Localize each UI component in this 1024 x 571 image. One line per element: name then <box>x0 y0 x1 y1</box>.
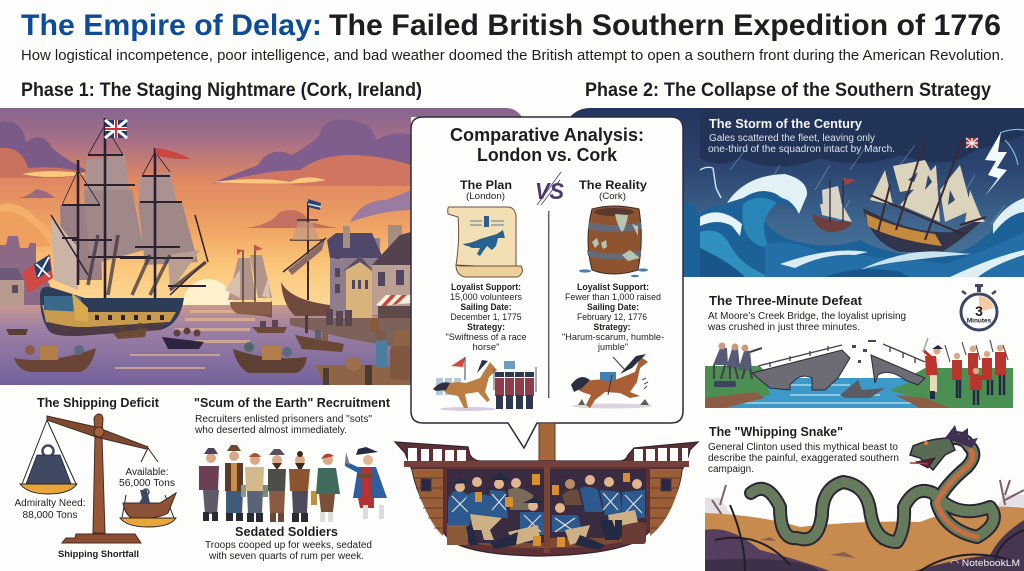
quay with people <box>290 309 411 350</box>
description <box>708 442 899 475</box>
creek <box>725 378 920 408</box>
heavy weight <box>26 446 71 484</box>
label: available: Available: <box>126 467 168 478</box>
description: At Moore's Creek Bridge, the loyalist uprising <box>708 311 906 322</box>
reality details: "Harum-scarum, humble- <box>562 332 664 342</box>
panel: scum of the earth recruitment <box>194 395 391 562</box>
right pan <box>120 518 176 527</box>
text: storm of the century: Gales scattered the fleet, leaving only <box>709 133 875 144</box>
sedated soldiers description: with seven quarts of rum per week. <box>208 551 364 562</box>
column heading: the reality: The Reality <box>579 178 647 192</box>
rowboat with crates right <box>233 349 307 373</box>
column heading: the reality <box>579 178 647 202</box>
small boat and weight <box>123 489 176 518</box>
label: admiralty need: Admiralty Need: <box>14 498 86 509</box>
heading: The Three-Minute Defeat <box>709 294 863 308</box>
sedated soldiers description <box>205 540 372 562</box>
moored ship with flag <box>281 199 330 316</box>
icon: stopwatch: 3 <box>975 303 983 319</box>
heading: "Scum of the Earth" Recruitment <box>194 395 391 410</box>
plan details: horse" <box>472 342 500 352</box>
panel: three-minute defeat <box>705 284 1013 408</box>
left pan <box>20 484 77 494</box>
description: who deserted almost immediately. <box>194 425 347 436</box>
callout heading: Comparative Analysis: <box>450 124 644 145</box>
mast <box>539 423 555 464</box>
plan details: Loyalist Support: <box>451 282 521 292</box>
label: available: 56,000 Tons <box>119 478 175 489</box>
callout heading <box>450 124 644 165</box>
plan details: "Swiftness of a race <box>446 332 526 342</box>
foreground dock and barrels <box>315 330 411 385</box>
panel: Cork harbour at sunset <box>0 108 522 385</box>
gun ports <box>95 315 164 320</box>
clouds <box>0 120 411 250</box>
soldiers left side <box>448 473 544 549</box>
illustration: harum-scarum horse <box>571 354 652 408</box>
illustration: broken bridge battle <box>705 338 1013 408</box>
sedated soldiers heading: Sedated Soldiers <box>235 524 338 539</box>
panel: whipping snake <box>705 425 1024 571</box>
serpent head <box>910 425 978 470</box>
subtitle: How logistical incompetence, poor intelligence, and bad weather doomed the British attempt to open a southern front during the American Revolution. <box>21 48 1004 64</box>
ship hull cross-section <box>395 442 698 556</box>
big wave body <box>684 174 1024 277</box>
title: The Empire of Delay: <box>21 9 322 42</box>
wave crest <box>727 174 807 214</box>
caption: Shipping Shortfall <box>58 549 139 560</box>
redcoats advancing <box>923 338 1008 405</box>
serpent body <box>751 438 994 542</box>
heading: The Shipping Deficit <box>37 395 160 410</box>
panel: shipping deficit <box>14 395 176 560</box>
title continuation: The Failed British Southern Expedition of 1776 <box>329 9 1001 42</box>
column heading: the plan: The Plan <box>460 178 512 192</box>
sun <box>183 279 233 305</box>
text: storm of the century <box>708 117 895 155</box>
ground <box>705 366 1013 408</box>
recruits line-up <box>199 445 387 522</box>
illustration: serpent in thorny landscape <box>705 425 1024 571</box>
description: describe the painful, exaggerated southern <box>708 453 899 464</box>
heading: phase 2: Phase 2: The Collapse of the Southern Strategy <box>585 80 991 101</box>
red ensign <box>22 254 53 293</box>
broken right span <box>871 355 925 385</box>
watermark: ◠ NotebookLM <box>950 558 1020 569</box>
planked side compartments <box>412 469 443 536</box>
text: storm of the century: one-third of the squadron intact by March. <box>708 144 895 155</box>
icon: balance scale <box>20 414 176 543</box>
pennant <box>155 148 190 159</box>
plan details: December 1, 1775 <box>450 312 522 322</box>
hull <box>40 287 184 336</box>
distant ship <box>812 178 856 232</box>
debris <box>840 380 885 398</box>
plan details: Strategy: <box>467 322 505 332</box>
divider <box>548 211 549 398</box>
callout: comparative analysis <box>411 117 683 448</box>
heading: phase 1: Phase 1: The Staging Nightmare (Cork, Ireland) <box>21 80 422 101</box>
plan details: Sailing Date: <box>460 302 512 312</box>
plan details <box>446 282 526 352</box>
illustration: swift horse and orderly troops <box>433 357 536 411</box>
sedated soldiers description: Troops cooped up for weeks, sedated <box>205 540 372 551</box>
reality details: Loyalist Support: <box>577 282 649 292</box>
icon: leaking barrel <box>579 206 648 277</box>
reality details: Fewer than 1,000 raised <box>565 292 661 302</box>
label: admiralty need: 88,000 Tons <box>22 510 78 521</box>
reality details: February 12, 1776 <box>577 312 647 322</box>
loyalists fleeing <box>713 342 762 387</box>
sails <box>60 205 102 280</box>
description <box>707 311 906 333</box>
union flag <box>105 120 127 138</box>
recruiting officer <box>345 447 387 519</box>
troops line <box>495 378 534 396</box>
description: campaign. <box>708 464 754 475</box>
panel: storm of the century <box>570 108 1024 277</box>
label: admiralty need <box>14 498 86 521</box>
description <box>194 414 372 436</box>
thorns <box>715 505 1024 571</box>
icon: stopwatch <box>961 284 997 330</box>
ground <box>705 507 1024 571</box>
water <box>0 305 393 385</box>
front swell <box>765 232 1024 277</box>
ocean waves <box>684 174 1024 277</box>
reality details: jumble" <box>597 342 628 352</box>
flag <box>966 138 978 148</box>
label: available <box>119 467 175 489</box>
text: storm of the century: The Storm of the Century <box>709 117 862 131</box>
plan details: 15,000 volunteers <box>450 292 522 302</box>
striped awning <box>376 295 411 306</box>
lightning left <box>700 167 721 198</box>
column heading: the plan: (London) <box>466 191 505 202</box>
town buildings right <box>327 225 411 322</box>
distant town left <box>0 236 50 305</box>
boats <box>6 320 344 373</box>
reality details <box>562 282 664 352</box>
column heading: the plan <box>460 178 512 202</box>
haze <box>705 495 1024 520</box>
railing posts <box>408 448 688 461</box>
description: was crushed in just three minutes. <box>707 322 860 333</box>
main ship <box>863 138 986 252</box>
VS emblem: VS <box>535 178 565 204</box>
storm clouds <box>700 108 1024 166</box>
callout heading: London vs. Cork <box>477 144 618 165</box>
water reflections <box>115 310 255 369</box>
rain <box>730 145 1005 225</box>
masts and yards <box>51 118 208 300</box>
description: General Clinton used this mythical beast to <box>708 442 898 453</box>
icon: stopwatch: Minutes <box>967 318 992 324</box>
hold interior <box>447 469 544 548</box>
purple rock foreground <box>705 529 830 571</box>
broken left span <box>752 350 850 390</box>
soldiers right side <box>552 473 645 550</box>
rowboat with crates left <box>14 348 96 372</box>
lightning right <box>985 132 1007 196</box>
distant ship <box>225 245 272 318</box>
heading: The "Whipping Snake" <box>709 425 843 439</box>
description: Recruiters enlisted prisoners and "sots" <box>195 414 372 425</box>
crate and chest <box>447 523 468 545</box>
reality details: Strategy: <box>594 322 630 332</box>
large ship <box>22 118 208 336</box>
reality details: Sailing Date: <box>587 302 639 312</box>
dead trees <box>712 480 1024 515</box>
icon: scroll with horse <box>448 207 522 277</box>
column heading: the reality: (Cork) <box>599 191 626 202</box>
